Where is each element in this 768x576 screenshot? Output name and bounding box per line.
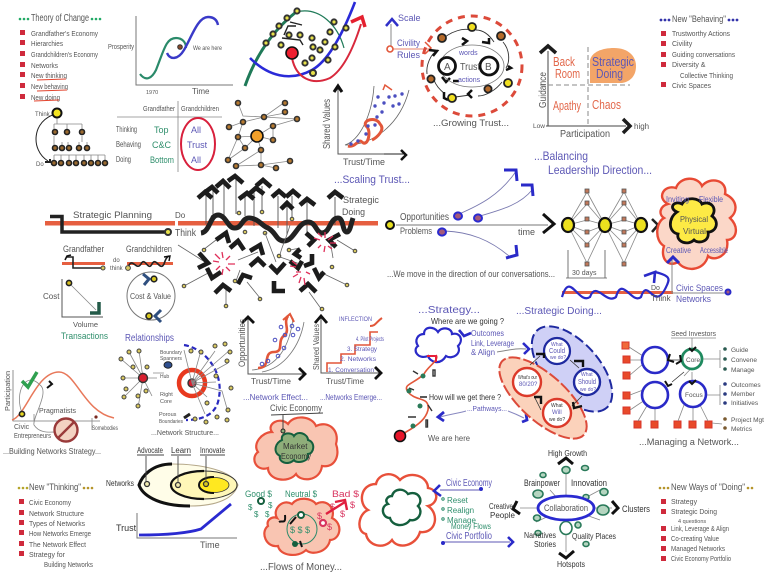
panel: theory of change list: Networks xyxy=(31,63,58,70)
panel: managing a network xyxy=(622,331,764,447)
diagram: 30 day cycles xyxy=(562,189,673,303)
chart: prosperity s-curves xyxy=(108,16,233,96)
black wave of strategic doing: Doing xyxy=(342,207,365,217)
diagram: collaboration hub xyxy=(489,449,650,569)
network with orange hub xyxy=(226,100,300,170)
chart: cost vs volume xyxy=(43,279,108,342)
upward arrows from the wave xyxy=(198,176,343,235)
panel: strategy path: ...Pathways... xyxy=(467,406,507,413)
panel: theory of change list: Grandfather's Economy xyxy=(31,31,98,38)
hierarchy diagram xyxy=(35,108,108,168)
diagram: advocate learn innovate ellipses: Advocate xyxy=(137,446,163,455)
panel: relationships network: ...Network Structure... xyxy=(151,430,219,437)
chart: trust over time: Time xyxy=(200,540,220,550)
chart: cost vs volume: Cost xyxy=(43,292,60,301)
legend: civic economy and portfolio xyxy=(434,478,513,547)
title: balancing leadership direction xyxy=(534,149,652,177)
panel: scale and civility rules: Civility xyxy=(397,38,420,48)
chart: networks emerge stairs: 3. Strategy xyxy=(347,346,378,353)
diagram: collaboration hub: Clusters xyxy=(622,504,650,514)
chart: building networks strategy bell curve: Pragmatists xyxy=(39,406,76,415)
panel: relationships network: Porous xyxy=(159,412,177,418)
cloud: flows of money: $ xyxy=(268,501,273,510)
panel: growing trust circle: words xyxy=(458,50,478,57)
panel: new behaving list: Collective Thinking xyxy=(680,73,733,80)
table: grandfather vs grandchildren: Trust xyxy=(187,140,208,150)
diagram: collaboration hub: Creative xyxy=(489,502,513,511)
panel: grandfather do think: do xyxy=(113,258,120,264)
chart: networks emerge stairs: Shared Values xyxy=(312,324,321,370)
diagram: advocate learn innovate ellipses: Learn xyxy=(171,446,191,455)
panel: scale and civility rules: Rules xyxy=(397,50,421,60)
panel: relationships network: Hub xyxy=(160,374,169,380)
diagram: cost and value xyxy=(127,272,175,322)
panel: managing a network: Convene xyxy=(731,357,757,364)
chart: guidance participation quadrant: Strategic xyxy=(592,54,634,69)
cloud: flows of money: Bad $ xyxy=(332,489,359,499)
diagram: collaboration hub: Stories xyxy=(534,540,556,549)
panel: relationships network: Right xyxy=(160,392,173,398)
panel: strategic doing questions: What xyxy=(551,342,563,348)
panel: strategic doing questions: we do? xyxy=(550,355,566,361)
table: grandfather vs grandchildren: All xyxy=(191,155,201,165)
cloud: market economy: Market xyxy=(283,442,308,451)
diagram: 30 day cycles: Do xyxy=(651,285,660,292)
table: grandfather vs grandchildren: Doing xyxy=(116,155,131,164)
diagram: collaboration hub: Collaboration xyxy=(544,503,588,513)
panel: theory of change list: Hierarchies xyxy=(31,41,63,48)
panel: new behaving list: Guiding conversations xyxy=(672,52,735,59)
panel: relationships network: Core xyxy=(160,399,172,405)
legend: civic economy and portfolio: Reset xyxy=(447,496,469,505)
panel: scale and civility rules: Scale xyxy=(398,13,421,23)
chart: guidance participation quadrant: Participation xyxy=(560,129,610,140)
cloud: flows of money: Good $ xyxy=(245,489,272,499)
panel: theory of change list: New thinking xyxy=(31,73,67,80)
panel: strategic planning bar: Think xyxy=(175,228,197,239)
table: grandfather vs grandchildren: All xyxy=(191,125,201,135)
panel: managing a network: Seed Investors xyxy=(671,331,716,338)
table: grandfather vs grandchildren: Thinking xyxy=(116,125,137,134)
chart: building networks strategy bell curve: Civic xyxy=(14,424,30,431)
panel: new thinking list: New "Thinking" xyxy=(29,482,81,493)
panel: opportunities and problems: ...We move in the direction of our conversations... xyxy=(387,269,555,279)
cloud: flows of money: $ xyxy=(350,500,355,510)
cloud: flows of money: $ xyxy=(248,503,253,512)
panel: strategy path: ...Strategy... xyxy=(418,305,480,316)
diagram: collaboration hub: People xyxy=(490,511,515,520)
diagram: advocate learn innovate ellipses: Innovate xyxy=(200,446,225,455)
panel: new thinking list xyxy=(18,482,93,569)
chart: network effect: Trust/Time xyxy=(251,377,292,386)
panel: grandfather do think: Grandchildren xyxy=(126,244,172,254)
diagram: collaboration hub: High Growth xyxy=(548,449,587,458)
panel: strategic planning bar: Do xyxy=(175,211,186,220)
panel: new ways of doing list: Co-creating Value xyxy=(671,536,719,543)
table: grandfather vs grandchildren: Behaving xyxy=(116,140,141,149)
legend: civic economy and portfolio: Realign xyxy=(447,506,474,515)
panel: strategic doing questions: What xyxy=(551,403,563,409)
swoosh curves with nodes xyxy=(245,2,365,86)
panel: growing trust circle: B xyxy=(485,62,492,73)
cloud: flows of money: $ xyxy=(330,502,335,512)
panel: relationships network xyxy=(119,333,233,437)
callout: civic spaces networks: Networks xyxy=(676,294,711,304)
panel: relationships network: Relationships xyxy=(125,333,174,344)
chart: network effect: Opportunities xyxy=(237,319,247,367)
legend: civic economy and portfolio: Money Flows xyxy=(451,522,491,531)
panel: new thinking list: Types of Networks xyxy=(29,521,85,528)
hierarchy diagram: Do xyxy=(36,162,44,168)
cloud: market economy xyxy=(254,403,337,480)
panel: new thinking list: How Networks Emerge xyxy=(29,531,91,538)
cloud: flows of money: $ xyxy=(265,510,270,519)
panel: new ways of doing list: Managed Networks xyxy=(671,546,725,553)
panel: growing trust circle: actions xyxy=(458,77,481,84)
chart: networks emerge stairs: 2. Networks xyxy=(340,356,377,363)
panel: new behaving list: Diversity & xyxy=(672,62,706,69)
panel: strategic doing questions: Will xyxy=(552,410,562,416)
panel: strategic doing questions: Could xyxy=(549,348,565,355)
diagram: collaboration hub: Quality Places xyxy=(572,531,616,541)
black wave of strategic doing: Strategic xyxy=(343,195,379,205)
panel: theory of change list: Theory of Change xyxy=(31,13,89,24)
panel: new thinking list: Strategy for xyxy=(29,552,66,559)
panel: managing a network: Core xyxy=(686,357,700,364)
panel: grandfather do think: think xyxy=(110,266,124,272)
cloud: flows of money: $ xyxy=(317,511,322,521)
panel: theory of change list: Grandchildren's Economy xyxy=(31,52,98,59)
panel: theory of change list: New behaving xyxy=(31,84,68,91)
table: grandfather vs grandchildren: Top xyxy=(154,125,169,135)
panel: new ways of doing list: 4 questions xyxy=(678,519,706,525)
panel: strategy path: & Align xyxy=(471,348,495,357)
panel: new thinking list: The Network Effect xyxy=(29,542,86,549)
legend: civic economy and portfolio: Manage xyxy=(447,516,476,525)
panel: managing a network: Focus xyxy=(685,392,703,399)
chart: network effect: ...Network Effect... xyxy=(243,393,308,402)
chart: guidance participation quadrant: Low xyxy=(533,123,545,130)
diagram: collaboration hub: Hotspots xyxy=(557,560,585,569)
panel: managing a network: Guide xyxy=(731,347,749,354)
table: grandfather vs grandchildren: Bottom xyxy=(150,155,174,165)
panel: strategy path: Link, Leverage xyxy=(471,339,514,348)
chart: networks emerge stairs: Trust/Time xyxy=(326,377,365,386)
panel: new ways of doing list: Strategic Doing xyxy=(671,509,717,516)
chart: prosperity s-curves: 1970 xyxy=(146,90,158,96)
chart: building networks strategy bell curve: Entrepreneurs xyxy=(14,433,51,440)
panel: strategy path: Outcomes xyxy=(471,328,504,338)
panel: new behaving list: Trustworthy Actions xyxy=(672,31,730,38)
panel: new thinking list: Building Networks xyxy=(44,562,93,569)
panel: opportunities and problems: Opportunities xyxy=(400,212,449,223)
panel: relationships network: Boundaries xyxy=(159,419,183,425)
chart: networks emerge stairs: 4. Pilot Projects xyxy=(356,336,384,343)
panel: strategic planning bar xyxy=(45,210,378,239)
chart: guidance participation quadrant: Guidance xyxy=(538,72,549,108)
panel: new ways of doing list: Link, Leverage & Align xyxy=(671,526,729,533)
legend: civic economy and portfolio: Civic Portfolio xyxy=(446,531,492,542)
panel: managing a network: Outcomes xyxy=(731,382,761,389)
panel: strategic doing questions xyxy=(487,306,627,452)
cloud: civic spaces xyxy=(657,179,736,269)
panel: strategy path: We are here xyxy=(428,434,471,443)
panel: opportunities and problems xyxy=(386,170,555,279)
cloud: flows of money: $ xyxy=(340,509,345,519)
cloud: civic spaces: Physical xyxy=(680,214,708,224)
chart: networks emerge stairs: INFLECTION xyxy=(339,317,372,323)
diagram: advocate learn innovate ellipses: Networks xyxy=(106,479,134,488)
panel: opportunities and problems: Problems xyxy=(400,226,432,236)
panel: strategic doing questions: ...Strategic Doing... xyxy=(516,306,602,317)
chart: guidance participation quadrant: high xyxy=(634,122,649,131)
chart: guidance participation quadrant: Apathy xyxy=(553,98,581,113)
chart: trust over time: Trust xyxy=(116,523,137,533)
panel: strategic doing questions: 80/20? xyxy=(519,382,538,388)
panel: new ways of doing list: New Ways of "Doing" xyxy=(671,482,745,492)
cloud: flows of money: Neutral $ xyxy=(285,489,317,499)
table: grandfather vs grandchildren xyxy=(116,101,222,172)
panel: new thinking list: Network Structure xyxy=(29,511,84,518)
panel: managing a network: Project Mgt xyxy=(731,417,764,424)
chart: guidance participation quadrant: Room xyxy=(555,66,580,81)
cloud: flows of money: $ xyxy=(254,510,259,519)
panel: managing a network: Manage xyxy=(731,367,755,374)
cloud: flows of money: ...Flows of Money... xyxy=(260,562,342,573)
panel: managing a network: ...Managing a Network... xyxy=(639,437,739,447)
chart: guidance participation quadrant: Doing xyxy=(596,66,623,81)
chart: scaling trust xyxy=(322,85,410,186)
chart: networks emerge stairs xyxy=(312,316,384,402)
chart: prosperity s-curves: We are here xyxy=(193,46,223,52)
cloud: market economy: Economy xyxy=(281,452,311,461)
chart: guidance participation quadrant xyxy=(533,46,649,140)
black wave of strategic doing xyxy=(201,195,379,241)
cloud: civic spaces: Flexible xyxy=(699,195,723,204)
panel: theory of change list xyxy=(19,13,101,102)
panel: new behaving list: Civility xyxy=(672,41,693,48)
panel: relationships network: Boundary xyxy=(160,350,183,356)
diagram: 30 day cycles: Think xyxy=(651,294,672,303)
cloud: flows of money: $ $ $ xyxy=(290,525,310,535)
panel: grandfather do think xyxy=(62,244,173,272)
panel: new ways of doing list xyxy=(659,482,753,563)
hierarchy diagram: Think xyxy=(35,112,51,118)
legend: civic economy and portfolio: Civic Economy xyxy=(446,478,492,489)
chart: trust over time xyxy=(116,504,237,550)
panel: growing trust circle xyxy=(422,16,522,128)
chart: cost vs volume: Volume xyxy=(73,320,98,329)
diagram: collaboration hub: Innovation xyxy=(571,478,607,488)
diagram: cost and value: Cost & Value xyxy=(130,291,171,301)
panel: managing a network: Metrics xyxy=(731,426,753,433)
chart: networks emerge stairs: ...Networks Emerge... xyxy=(320,393,382,402)
diagram: 30 day cycles: 30 days xyxy=(572,270,597,277)
cloud: civic spaces: Accessible xyxy=(700,246,728,255)
chart: networks emerge stairs: 1. Conversation xyxy=(328,367,374,374)
cloud: civic portfolio xyxy=(359,474,436,546)
cloud: flows of money xyxy=(245,489,359,573)
callout: civic spaces networks: Civic Spaces xyxy=(676,283,723,293)
panel: strategy path: Where are we going ? xyxy=(431,316,504,326)
chart: guidance participation quadrant: Back xyxy=(553,54,575,69)
cloud: flows of money: $ xyxy=(327,522,332,532)
chart: scaling trust: Trust/Time xyxy=(343,157,385,167)
panel: managing a network: Initiatives xyxy=(731,400,759,407)
chart: network effect xyxy=(237,314,308,402)
diagram: collaboration hub: Brainpower xyxy=(524,478,560,488)
panel: opportunities and problems: time xyxy=(518,227,535,237)
panel: new ways of doing list: Strategy xyxy=(671,499,698,506)
panel: new behaving list: New "Behaving" xyxy=(672,14,726,24)
title: balancing leadership direction: Leadership Direction... xyxy=(548,163,652,177)
chart: cost vs volume: Transactions xyxy=(61,331,108,342)
panel: growing trust circle: Trust xyxy=(460,62,480,73)
panel: relationships network: Spanners xyxy=(160,356,183,362)
panel: managing a network: Member xyxy=(731,391,756,398)
panel: strategy path: How will we get there ? xyxy=(429,393,501,402)
panel: theory of change list: New doing xyxy=(31,95,60,102)
cloud: civic spaces: Virtual xyxy=(683,226,706,236)
panel: strategy path xyxy=(394,305,529,443)
cloud: market economy: Civic Economy xyxy=(270,403,322,413)
cloud: civic spaces: Creative xyxy=(666,246,691,255)
panel: new ways of doing list: Civic Economy Portfolio xyxy=(671,556,731,563)
table: grandfather vs grandchildren: Grandchildren xyxy=(181,106,219,113)
panel: new thinking list: Civic Economy xyxy=(29,500,71,507)
panel: new behaving list xyxy=(660,14,738,90)
title: balancing leadership direction: ...Balancing xyxy=(534,149,588,163)
bursts and converging arrows xyxy=(178,225,357,311)
table: grandfather vs grandchildren: Grandfather xyxy=(143,106,176,113)
panel: growing trust circle: A xyxy=(444,62,451,73)
chart: building networks strategy bell curve: ...Building Networks Strategy... xyxy=(3,447,101,456)
panel: strategic doing questions: we do? xyxy=(580,387,596,393)
chart: scaling trust: Shared Values xyxy=(322,99,333,149)
diagram: collaboration hub: Narratives xyxy=(524,531,556,540)
panel: new behaving list: Civic Spaces xyxy=(672,83,711,90)
panel: strategic doing questions: What's our xyxy=(518,375,537,381)
table: grandfather vs grandchildren: C&C xyxy=(152,140,172,150)
chart: building networks strategy bell curve: Participation xyxy=(5,371,12,411)
cloud: civic spaces: Inviting xyxy=(666,195,689,204)
chart: prosperity s-curves: Prosperity xyxy=(108,44,134,51)
panel: strategic planning bar: Strategic Planning xyxy=(73,210,152,220)
panel: grandfather do think: Grandfather xyxy=(63,244,104,254)
panel: strategic doing questions: What xyxy=(581,372,593,378)
panel: strategic doing questions: Should xyxy=(578,379,596,386)
chart: prosperity s-curves: Time xyxy=(192,87,210,96)
chart: scaling trust: ...Scaling Trust... xyxy=(334,174,410,186)
panel: scale and civility rules xyxy=(386,13,431,60)
panel: strategic doing questions: we do? xyxy=(549,417,565,423)
chart: building networks strategy bell curve: Somebodies xyxy=(92,425,119,432)
panel: growing trust circle: ...Growing Trust... xyxy=(433,118,509,128)
chart: building networks strategy bell curve xyxy=(3,370,119,456)
diagram: advocate learn innovate ellipses xyxy=(106,446,238,506)
chart: guidance participation quadrant: Chaos xyxy=(592,97,621,112)
callout: civic spaces networks xyxy=(667,257,730,304)
